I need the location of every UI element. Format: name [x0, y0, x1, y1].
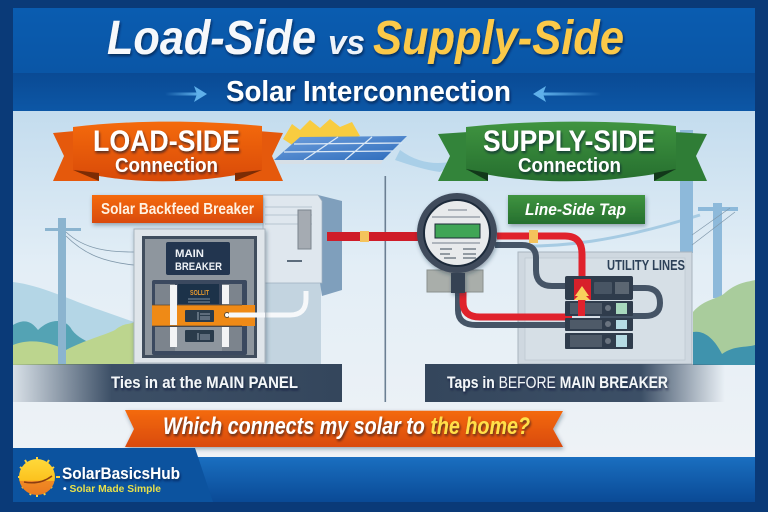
background scenery: left: [13, 218, 134, 365]
main breaker label: [166, 242, 230, 275]
caption: ties in at the main panel: Ties in at the MAIN PANEL: [111, 373, 298, 392]
grey conduit wires: [458, 245, 660, 325]
label: line-side tap: [508, 195, 645, 224]
question banner: [125, 410, 563, 447]
title: vs: [328, 24, 365, 62]
footer bar: [13, 457, 755, 502]
red tap wires: [463, 236, 582, 317]
title banner background: [13, 8, 755, 73]
caption: ties in at the main panel: [13, 364, 342, 402]
title: [107, 12, 624, 65]
subtitle band: [13, 73, 755, 111]
red feed wire between panels: [327, 231, 422, 242]
logo: tagline: • Solar Made Simple: [63, 483, 161, 495]
logo tab: [13, 448, 213, 502]
orange backfeed breaker strip: [152, 305, 255, 326]
ribbon: supply-side: [438, 122, 707, 181]
ribbon: supply-side: SUPPLY-SIDE: [483, 125, 655, 158]
solar label: SOLLIT: [190, 290, 210, 297]
subtitle: Solar Interconnection: [226, 76, 511, 108]
utility box: UTILITY LINES: [607, 257, 685, 274]
illustration background: [13, 111, 755, 457]
ribbon: load-side: [53, 122, 283, 181]
title: Supply-Side: [373, 12, 624, 65]
logo: brand name: SolarBasicsHub: [62, 464, 180, 483]
solar panel with sun: [274, 119, 407, 164]
white wire over breaker strip: [229, 312, 265, 318]
load-side wall unit: [263, 195, 342, 364]
ribbon: load-side: Connection: [115, 155, 218, 177]
ribbon: supply-side: Connection: [518, 155, 621, 177]
red wire tap glow: [529, 230, 538, 243]
label: solar backfeed breaker: [92, 195, 263, 223]
caption: taps in before main breaker: [425, 364, 725, 402]
utility box: [518, 252, 692, 364]
main panel: [134, 229, 265, 363]
caption: taps in before main breaker: Taps in BEFORE MAIN BREAKER: [447, 373, 668, 392]
label: line-side tap: Line-Side Tap: [525, 200, 626, 219]
white connector wire: [227, 291, 306, 315]
meter mount: [427, 270, 483, 292]
main breaker label: MAIN: [175, 248, 204, 260]
question banner: Which connects my solar to the home?: [163, 413, 530, 440]
breaker block: [565, 276, 633, 349]
main breaker label: BREAKER: [175, 261, 222, 273]
background scenery: right: [395, 130, 755, 365]
center divider: [384, 176, 386, 402]
ribbon: load-side: LOAD-SIDE: [93, 125, 240, 158]
title: Load-Side: [107, 12, 316, 65]
arrow: right subtitle arrow: [533, 86, 601, 102]
logo: sun icon: [18, 457, 60, 497]
arrow: left subtitle arrow: [165, 86, 207, 102]
label: solar backfeed breaker: Solar Backfeed Breaker: [101, 201, 254, 218]
electric meter: [417, 193, 497, 293]
